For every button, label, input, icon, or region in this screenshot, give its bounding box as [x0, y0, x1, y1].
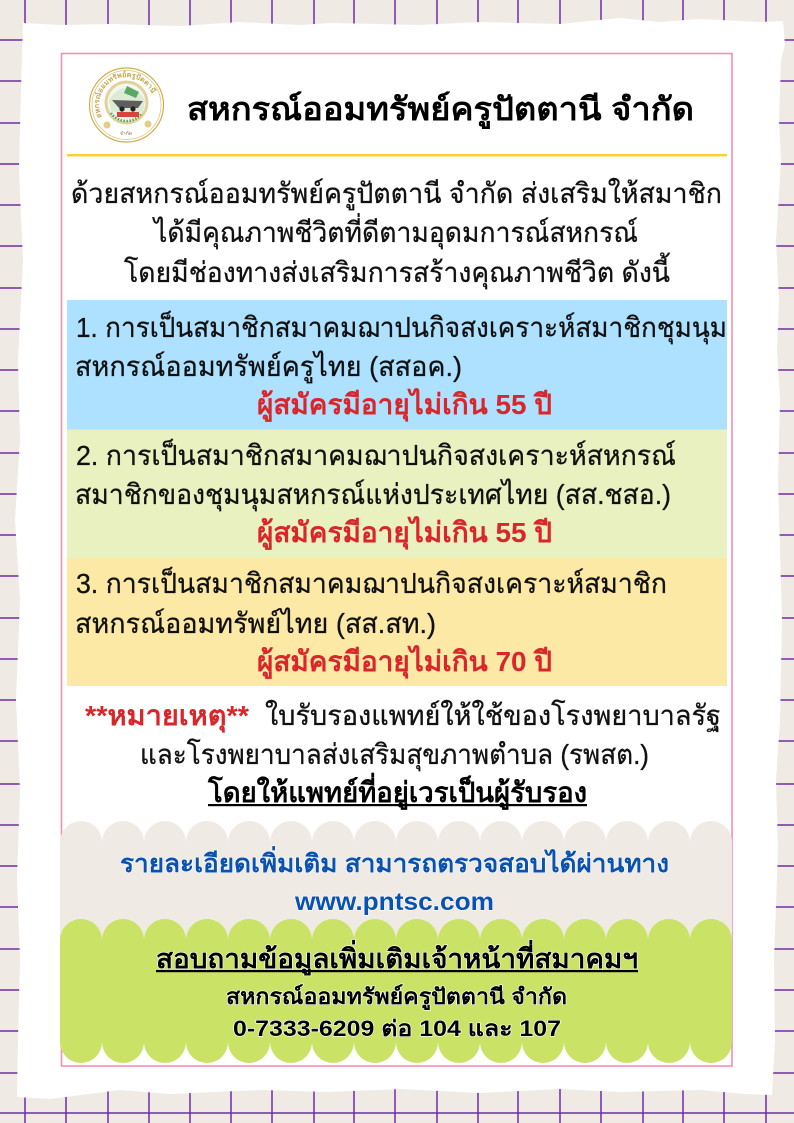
- panel: green scalloped contact: สหกรณ์ออมทรัพย์ครูปัตตานี จำกัด: [226, 984, 567, 1011]
- panel: item 3: สหกรณ์ออมทรัพย์ไทย (สส.สท.): [75, 608, 436, 639]
- divider: yellow rule: [67, 154, 727, 156]
- panel: item 2: [67, 430, 727, 558]
- text block: introduction: [71, 177, 722, 290]
- title: สหกรณ์ออมทรัพย์ครูปัตตานี จำกัด: [187, 91, 694, 130]
- text block: note: [85, 699, 721, 810]
- panel: item 2: ผู้สมัครมีอายุไม่เกิน 55 ปี: [257, 516, 552, 550]
- panel: green scalloped contact: สอบถามข้อมูลเพิ่มเติมเจ้าหน้าที่สมาคมฯ: [156, 939, 638, 976]
- panel: item 3: [67, 558, 727, 686]
- icon: cooperative seal logo: จำกัด: [120, 131, 132, 137]
- text block: note: ใบรับรองแพทย์ให้ใช้ของโรงพยาบาลรัฐ: [265, 699, 721, 732]
- text block: note: **หมายเหตุ**: [85, 700, 249, 733]
- panel: beige scalloped details: [60, 821, 732, 960]
- panel: pink frame: [62, 54, 732, 1066]
- panel: item 3: 3. การเป็นสมาชิกสมาคมฌาปนกิจสงเคราะห์สมาชิก: [76, 566, 667, 599]
- panel: green scalloped contact: [60, 919, 732, 1063]
- panel: beige scalloped details: รายละเอียดเพิ่มเติม สามารถตรวจสอบได้ผ่านทาง: [120, 846, 669, 878]
- text block: note: โดยให้แพทย์ที่อยู่เวรเป็นผู้รับรอง: [207, 772, 587, 810]
- panel: item 1: ผู้สมัครมีอายุไม่เกิน 55 ปี: [257, 388, 552, 422]
- icon: cooperative seal logo: [88, 67, 164, 143]
- panel: item 2: สมาชิกของชุมนุมสหกรณ์แห่งประเทศไทย (สส.ชสอ.): [75, 479, 671, 512]
- panel: item 1: [67, 300, 727, 430]
- panel: item 1: สหกรณ์ออมทรัพย์ครูไทย (สสอค.): [75, 351, 462, 384]
- text block: introduction: ได้มีคุณภาพชีวิตที่ดีตามอุดมการณ์สหกรณ์: [152, 213, 638, 250]
- panel: item 3: ผู้สมัครมีอายุไม่เกิน 70 ปี: [257, 645, 552, 679]
- icon: cooperative seal logo: สหกรณ์ออมทรัพย์ครูปัตตานี: [94, 70, 157, 118]
- panel: green scalloped contact: 0-7333-6209 ต่อ 104 และ 107: [233, 1016, 561, 1041]
- text block: introduction: โดยมีช่องทางส่งเสริมการสร้างคุณภาพชีวิต ดังนี้: [124, 252, 670, 290]
- panel: item 2: 2. การเป็นสมาชิกสมาคมฌาปนกิจสงเคราะห์สหกรณ์: [76, 438, 676, 471]
- text block: introduction: ด้วยสหกรณ์ออมทรัพย์ครูปัตตานี จำกัด ส่งเสริมให้สมาชิก: [71, 177, 722, 211]
- panel: item 1: 1. การเป็นสมาชิกสมาคมฌาปนกิจสงเคราะห์สมาชิกชุมนุม: [76, 310, 727, 345]
- text block: note: และโรงพยาบาลส่งเสริมสุขภาพตำบล (รพสต.): [140, 738, 649, 772]
- panel: beige scalloped details: www.pntsc.com: [294, 888, 494, 916]
